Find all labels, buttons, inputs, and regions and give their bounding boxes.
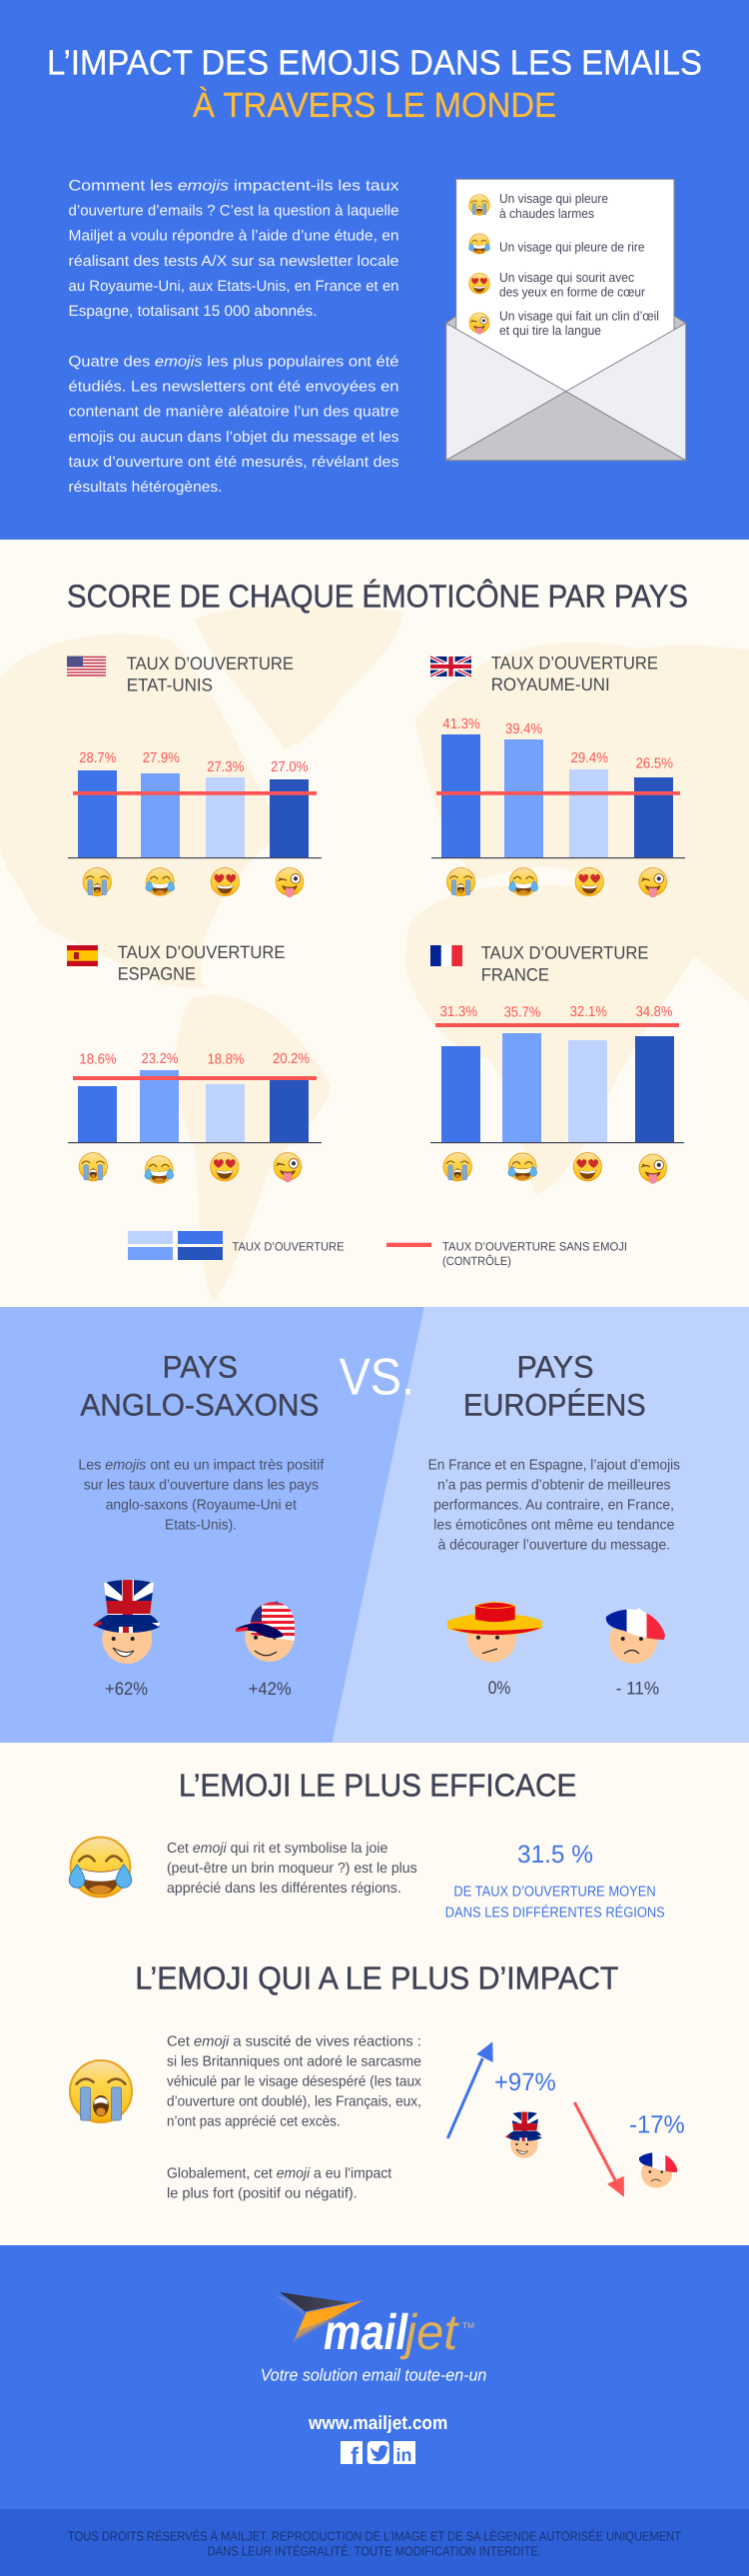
text block: le plus fort (positif ou négatif). [167,2185,358,2201]
chart title: TAUX D’OUVERTURE [127,653,294,673]
text block [167,2033,422,2201]
panel: emoji le plus efficace [69,1768,665,1921]
panel: comparison [0,1307,749,1743]
vs label: VS. [340,1349,414,1407]
legend: TAUX D’OUVERTURE SANS EMOJI [442,1239,627,1253]
logo: mailjet: mail [324,2304,408,2360]
text block: européens [428,1458,680,1554]
heading: L’EMOJI QUI A LE PLUS D’IMPACT [135,1960,618,1996]
heading: pays anglo-saxons: PAYS [163,1349,238,1384]
legend: TAUX D’OUVERTURE [232,1239,344,1253]
intro text block: Mailjet a voulu répondre à l’aide d’une étude, en [68,228,398,245]
heading: pays anglo-saxons [80,1349,319,1422]
text block: européens: En France et en Espagne, l’ajout d’emojis [428,1458,680,1474]
value: +97%: +97% [494,2068,556,2096]
chart: France [430,942,684,1183]
logo: mailjet: TM [462,2321,474,2330]
head: UK top hat [93,1577,160,1664]
value: +62%: +62% [105,1679,148,1699]
text block: apprécié dans les différentes régions. [167,1881,401,1897]
stat: 31.5%: DANS LES DIFFÉRENTES RÉGIONS [445,1904,665,1921]
legal band: DANS LEUR INTÉGRALITÉ. TOUTE MODIFICATION INTERDITE. [208,2543,541,2558]
letter item: crying face [469,191,608,221]
intro text block: étudiés. Les newsletters ont été envoyées en [68,379,399,396]
chart title: TAUX D’OUVERTURE [481,942,649,962]
values: 28.7% [79,750,116,766]
world map background [0,606,749,1302]
legend [128,1231,627,1268]
values: 27.0% [271,759,309,775]
icon: linkedin [393,2441,415,2465]
emoji axis [443,1153,667,1183]
arrow down [574,2102,624,2197]
values: 41.3% [442,716,480,732]
icon: facebook [341,2441,363,2470]
values: 35.7% [504,1005,540,1021]
text block: d’ouverture ont doublé), les Français, eux, [167,2093,421,2109]
emoji axis [447,867,667,897]
letter item: winking face [469,308,659,338]
values [79,750,309,775]
values: 39.4% [505,721,542,737]
intro text block: Comment les emojis impactent-ils les taux [68,178,399,194]
intro text block: Espagne, totalisant 15 000 abonnés. [68,303,318,320]
intro text block [68,178,399,496]
text block: anglo-saxons: Les emojis ont eu un impact très positif [78,1458,325,1474]
text block: européens: les émoticônes ont même eu tendance [433,1518,674,1534]
icon: laughing emoji [69,1838,132,1897]
values: 18.6% [79,1052,117,1068]
stat: 31.5%: DE TAUX D’OUVERTURE MOYEN [453,1884,656,1900]
chart title: ROYAUME-UNI [491,674,610,694]
intro text block: résultats hétérogènes. [68,479,222,496]
text block: n’ont pas apprécié cet excès. [167,2113,341,2129]
icon: Spain flag [67,945,98,966]
value: +42%: +42% [249,1679,292,1699]
letter item: heart eyes face: Un visage qui sourit avec [499,270,634,285]
heading: pays anglo-saxons: ANGLO-SAXONS [80,1387,319,1422]
panel: emoji qui a le plus d'impact [70,1960,685,2201]
text block: européens: performances. Au contraire, en France, [433,1498,674,1514]
head: France small [634,2149,678,2188]
emoji axis [79,1153,302,1183]
chart title: TAUX D’OUVERTURE [491,653,658,673]
icon: crying emoji [70,2060,132,2122]
title: L’IMPACT DES EMOJIS DANS LES EMAILS [47,44,702,82]
text block: Cet emoji a suscité de vives réactions : [167,2033,421,2049]
head: UK small [505,2110,542,2158]
stat: 31.5% [445,1841,665,1921]
chart: Espagne [67,942,322,1183]
values: 23.2% [142,1051,178,1067]
letter item: laughing face: Un visage qui pleure de rire [499,240,645,255]
icon: twitter [368,2441,389,2464]
values: 34.8% [636,1004,673,1020]
title [47,44,702,125]
text block: anglo-saxons: Etats-Unis). [165,1518,237,1534]
tagline: Votre solution email toute-en-un [261,2366,486,2385]
intro text block: au Royaume-Uni, aux Etats-Unis, en France et en [68,278,399,295]
stat: 31.5%: 31.5 % [517,1841,593,1869]
chart title: TAUX D’OUVERTURE [118,942,286,962]
chart title: ETAT-UNIS [127,675,213,695]
bars [68,1070,322,1143]
value: -17%: -17% [629,2110,685,2138]
head: French beret [599,1604,667,1664]
head: US cap [236,1601,298,1662]
values: 31.3% [439,1004,477,1020]
heading: pays européens: PAYS [517,1349,593,1384]
values: 32.1% [570,1004,607,1020]
intro text block: taux d’ouverture ont été mesurés, révélant des [68,454,399,471]
letter item: crying face: Un visage qui pleure [499,191,608,206]
text block: véhiculé par le visage désespéré (les taux [167,2073,422,2089]
values [79,1051,310,1068]
title: À TRAVERS LE MONDE [193,86,556,125]
values [439,1004,673,1021]
values: 20.2% [273,1051,310,1067]
letter item: laughing face [468,234,645,255]
letter item: winking face: et qui tire la langue [499,323,601,338]
chart title [491,653,658,694]
text block: Cet emoji qui rit et symbolise la joie [167,1841,387,1857]
values [442,716,673,772]
intro text block: réalisant des tests A/X sur sa newsletter locale [68,253,399,270]
text block: (peut-être un brin moqueur ?) est le plus [167,1861,417,1877]
bars [68,770,322,858]
icon: facebook: f [351,2443,360,2470]
legal band [0,2509,749,2576]
letter item: heart eyes face: des yeux en forme de cœur [499,284,646,299]
heading: SCORE DE CHAQUE ÉMOTICÔNE PAR PAYS [67,579,688,615]
intro text block: emojis ou aucun dans l’objet du message et les [68,429,399,446]
icon: US flag [67,656,106,676]
value: -11%: - 11% [616,1679,659,1699]
letter item: crying face: à chaudes larmes [499,206,594,221]
panel: footer [0,2245,749,2576]
icon: UK flag [430,656,471,676]
icon: linkedin: in [395,2445,411,2465]
panel: header [0,0,749,540]
text block: européens: n’a pas permis d’obtenir de meilleures [437,1478,671,1494]
values: 29.4% [571,750,608,766]
icon: France flag [430,945,462,966]
legend: (CONTRÔLE) [442,1254,511,1268]
intro text block: Quatre des emojis les plus populaires ont été [68,354,399,370]
values: 18.8% [208,1052,244,1068]
heading: pays européens [463,1349,646,1422]
values: 26.5% [636,756,673,772]
chart title [118,942,286,984]
logo: mailjet [274,2292,474,2360]
logo: mailjet: jet [399,2304,459,2360]
bars [431,734,685,858]
intro text block: d’ouverture d’emails ? C’est la question à laquelle [68,203,399,220]
text block: anglo-saxons [78,1458,325,1534]
text block: anglo-saxons: sur les taux d’ouverture dans les pays [84,1478,319,1494]
text block [167,1841,417,1897]
value: 0%: 0% [488,1678,510,1698]
letter item: heart eyes face [469,270,646,299]
values: 27.3% [207,759,244,775]
panel: score par pays [0,579,749,1302]
head: Spanish hat [447,1603,542,1663]
chart title [127,653,294,695]
intro text block: contenant de manière aléatoire l’un des quatre [68,404,399,421]
emoji axis [83,867,304,897]
arrow up [447,2041,493,2138]
values: 27.9% [143,750,180,766]
letter item: winking face: Un visage qui fait un clin d’œil [499,308,659,323]
chart title: ESPAGNE [118,964,196,984]
heading: pays européens: EUROPÉENS [463,1387,646,1422]
envelope with letter [446,179,686,461]
chart title [481,942,649,984]
website: www.mailjet.com [308,2413,447,2434]
chart: Etats-Unis [67,653,322,897]
bars [430,1023,684,1143]
text block: si les Britanniques ont adoré le sarcasme [167,2053,421,2069]
text block: Globalement, cet emoji a eu l'impact [167,2165,391,2181]
chart: Royaume-Uni [430,653,685,897]
text block: européens: à décourager l’ouverture du message. [438,1538,670,1554]
heading: L’EMOJI LE PLUS EFFICACE [179,1768,576,1804]
text block: anglo-saxons: anglo-saxons (Royaume-Uni et [106,1498,297,1514]
chart title: FRANCE [481,964,549,984]
